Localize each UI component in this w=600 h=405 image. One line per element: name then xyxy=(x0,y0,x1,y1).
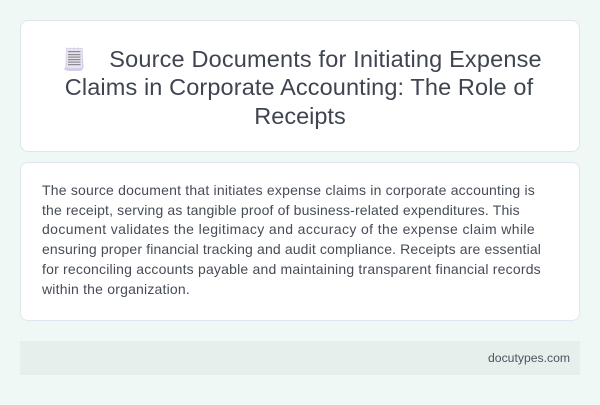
footer bar xyxy=(20,341,580,375)
text block: description: within the organization. xyxy=(42,280,190,296)
panel: title card xyxy=(20,20,580,152)
text block: description: for reconciling accounts payable and maintaining transparent financial records xyxy=(42,261,541,277)
panel: description card xyxy=(20,162,580,321)
heading xyxy=(65,46,542,129)
text block: description xyxy=(42,182,541,297)
text block: description: document validates the legitimacy and accuracy of the expense claim while xyxy=(42,221,535,237)
text block: description: the receipt, serving as tangible proof of business-related expenditures. This xyxy=(42,202,520,218)
text block: description: The source document that initiates expense claims in corporate accounting is xyxy=(42,182,535,198)
text block: description: ensuring proper financial tracking and audit compliance. Receipts are essential xyxy=(42,241,541,257)
heading: Receipts xyxy=(254,103,346,129)
footer text: docutypes.com xyxy=(488,351,570,365)
icon: receipt document xyxy=(64,48,84,71)
heading: Source Documents for Initiating Expense xyxy=(109,46,542,72)
heading: Claims in Corporate Accounting: The Role of xyxy=(65,74,533,100)
